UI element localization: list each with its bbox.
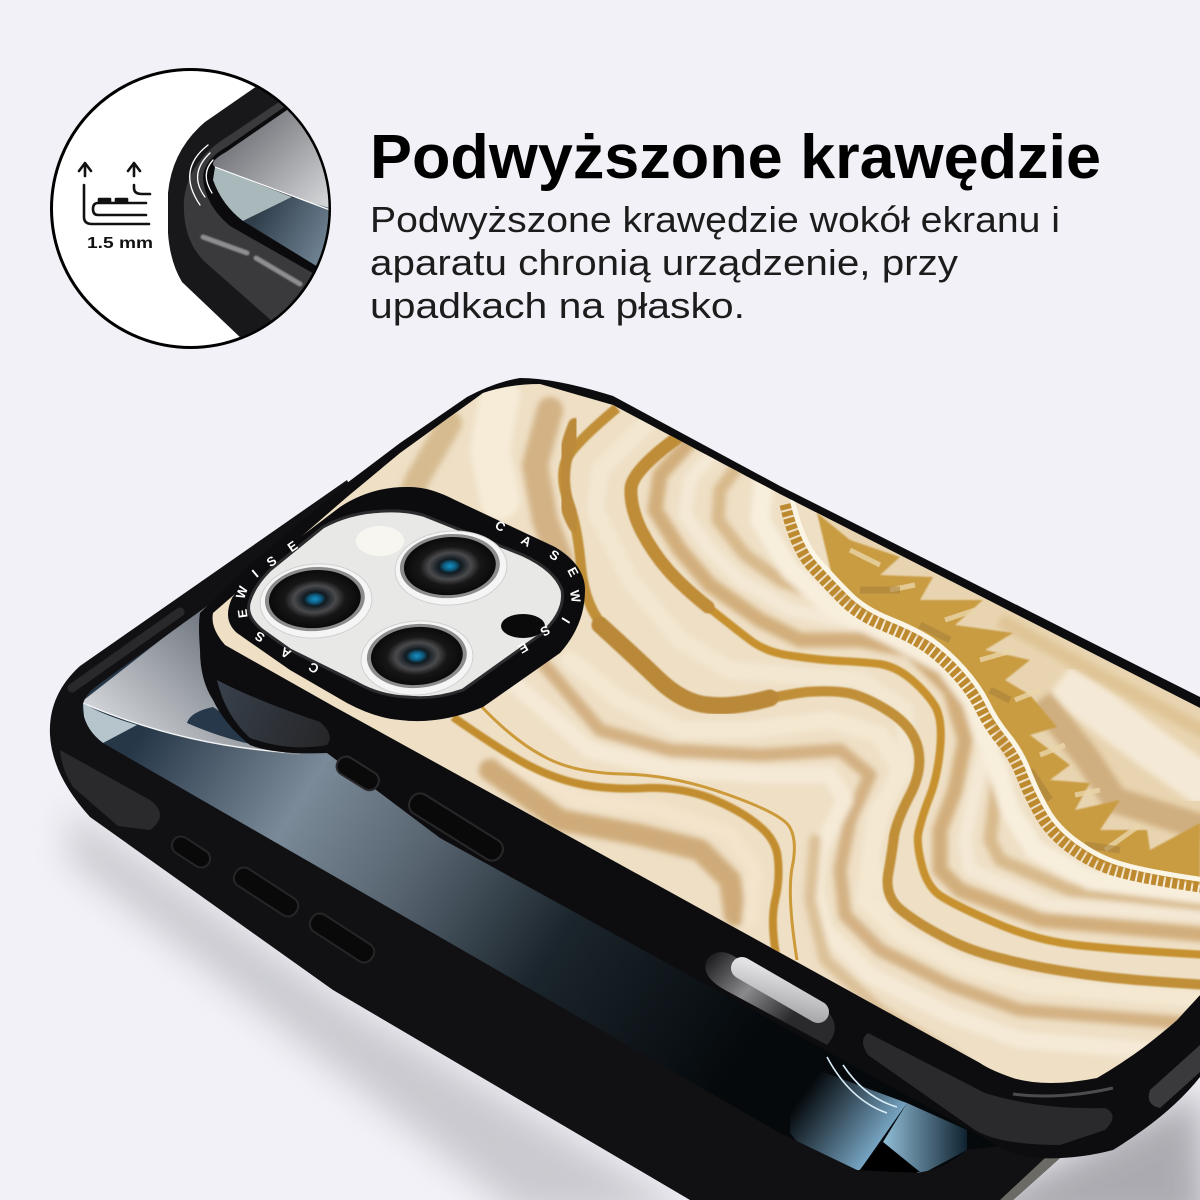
casewise lettering: bottom left: C bbox=[305, 659, 322, 677]
upper right field bbox=[815, 512, 1200, 850]
label: 1.5 mm: 1.5 mm bbox=[87, 235, 153, 252]
casewise lettering: top right: E bbox=[564, 565, 582, 580]
gold vein: lower main bbox=[453, 717, 779, 960]
front phone button: small switch bbox=[333, 753, 382, 794]
gold vein: outer band bbox=[563, 408, 1200, 985]
front phone corner gloss bbox=[217, 680, 330, 747]
casewise lettering: bottom left: I bbox=[249, 567, 261, 580]
casewise lettering: top right: S bbox=[547, 547, 562, 564]
front phone case body bbox=[199, 378, 1200, 1158]
speaker grille bbox=[1149, 1045, 1200, 1108]
casewise lettering: bottom left bbox=[233, 537, 322, 677]
casewise lettering: top right bbox=[492, 517, 584, 657]
lens: top right bbox=[393, 527, 509, 609]
front phone button: side bbox=[405, 790, 507, 864]
camera bezel bbox=[228, 487, 585, 721]
icon: bevel arcs bbox=[190, 145, 213, 205]
title: Podwyższone krawędzie bbox=[370, 123, 1101, 192]
casewise lettering: top right: S bbox=[537, 622, 553, 640]
inset circle: raised edge detail bbox=[52, 70, 340, 348]
casewise lettering: bottom left: S bbox=[264, 552, 280, 570]
crystal vein: white line bbox=[792, 499, 1200, 881]
casewise lettering: bottom left: E bbox=[285, 537, 301, 555]
marble back panel bbox=[190, 370, 1200, 1100]
gold vein: lower thin bbox=[480, 705, 797, 960]
casewise lettering: top right: A bbox=[518, 532, 535, 550]
back phone screen bbox=[82, 606, 998, 1173]
casewise lettering: bottom left: A bbox=[277, 644, 294, 662]
description text bbox=[370, 199, 1060, 326]
description text: aparatu chronią urządzenie, przy bbox=[370, 242, 958, 283]
icon: raised edge diagram bbox=[79, 163, 150, 224]
gold spiked mineral field bbox=[817, 513, 1200, 885]
gold vein: inner band bbox=[631, 438, 1200, 955]
casewise lettering: top right: E bbox=[515, 639, 531, 657]
port metal insert bbox=[742, 968, 818, 1012]
casewise lettering: top right: W bbox=[567, 589, 584, 604]
back phone button: small bbox=[168, 833, 214, 871]
lens: left bbox=[258, 560, 374, 642]
camera island bbox=[228, 487, 585, 721]
lens: bottom bbox=[359, 617, 475, 699]
back phone translucent edge bbox=[1000, 1158, 1060, 1200]
microphone hole bbox=[501, 614, 545, 638]
crystal vein: gold edge bbox=[787, 504, 1200, 886]
camera glass plate bbox=[248, 511, 563, 698]
casewise lettering: top right: I bbox=[558, 615, 573, 626]
casewise lettering: bottom left: E bbox=[234, 608, 251, 619]
back phone case body bbox=[50, 480, 1060, 1200]
description text: upadkach na płasko. bbox=[370, 285, 745, 326]
back phone button: volume down bbox=[306, 910, 378, 966]
back phone corner gloss bbox=[60, 750, 160, 830]
inset phone corner close-up bbox=[168, 86, 340, 340]
description text: Podwyższone krawędzie wokół ekranu i bbox=[370, 199, 1060, 240]
front phone bbox=[190, 370, 1200, 1158]
back phone button: volume up bbox=[230, 864, 302, 920]
blue wallpaper detail bbox=[790, 1073, 907, 1170]
back phone bbox=[50, 480, 1060, 1200]
casewise lettering: bottom left: W bbox=[233, 583, 251, 601]
camera flash bbox=[356, 526, 404, 556]
casewise lettering: bottom left: S bbox=[252, 628, 267, 646]
front phone bottom corner gloss bbox=[863, 1033, 1112, 1145]
side port bbox=[705, 952, 835, 1045]
casewise lettering: top right: C bbox=[492, 517, 509, 535]
drop shadow under phones bbox=[70, 810, 1200, 1200]
marble tonal bands bbox=[400, 395, 1200, 1060]
gold vein: thick section bbox=[600, 625, 770, 706]
